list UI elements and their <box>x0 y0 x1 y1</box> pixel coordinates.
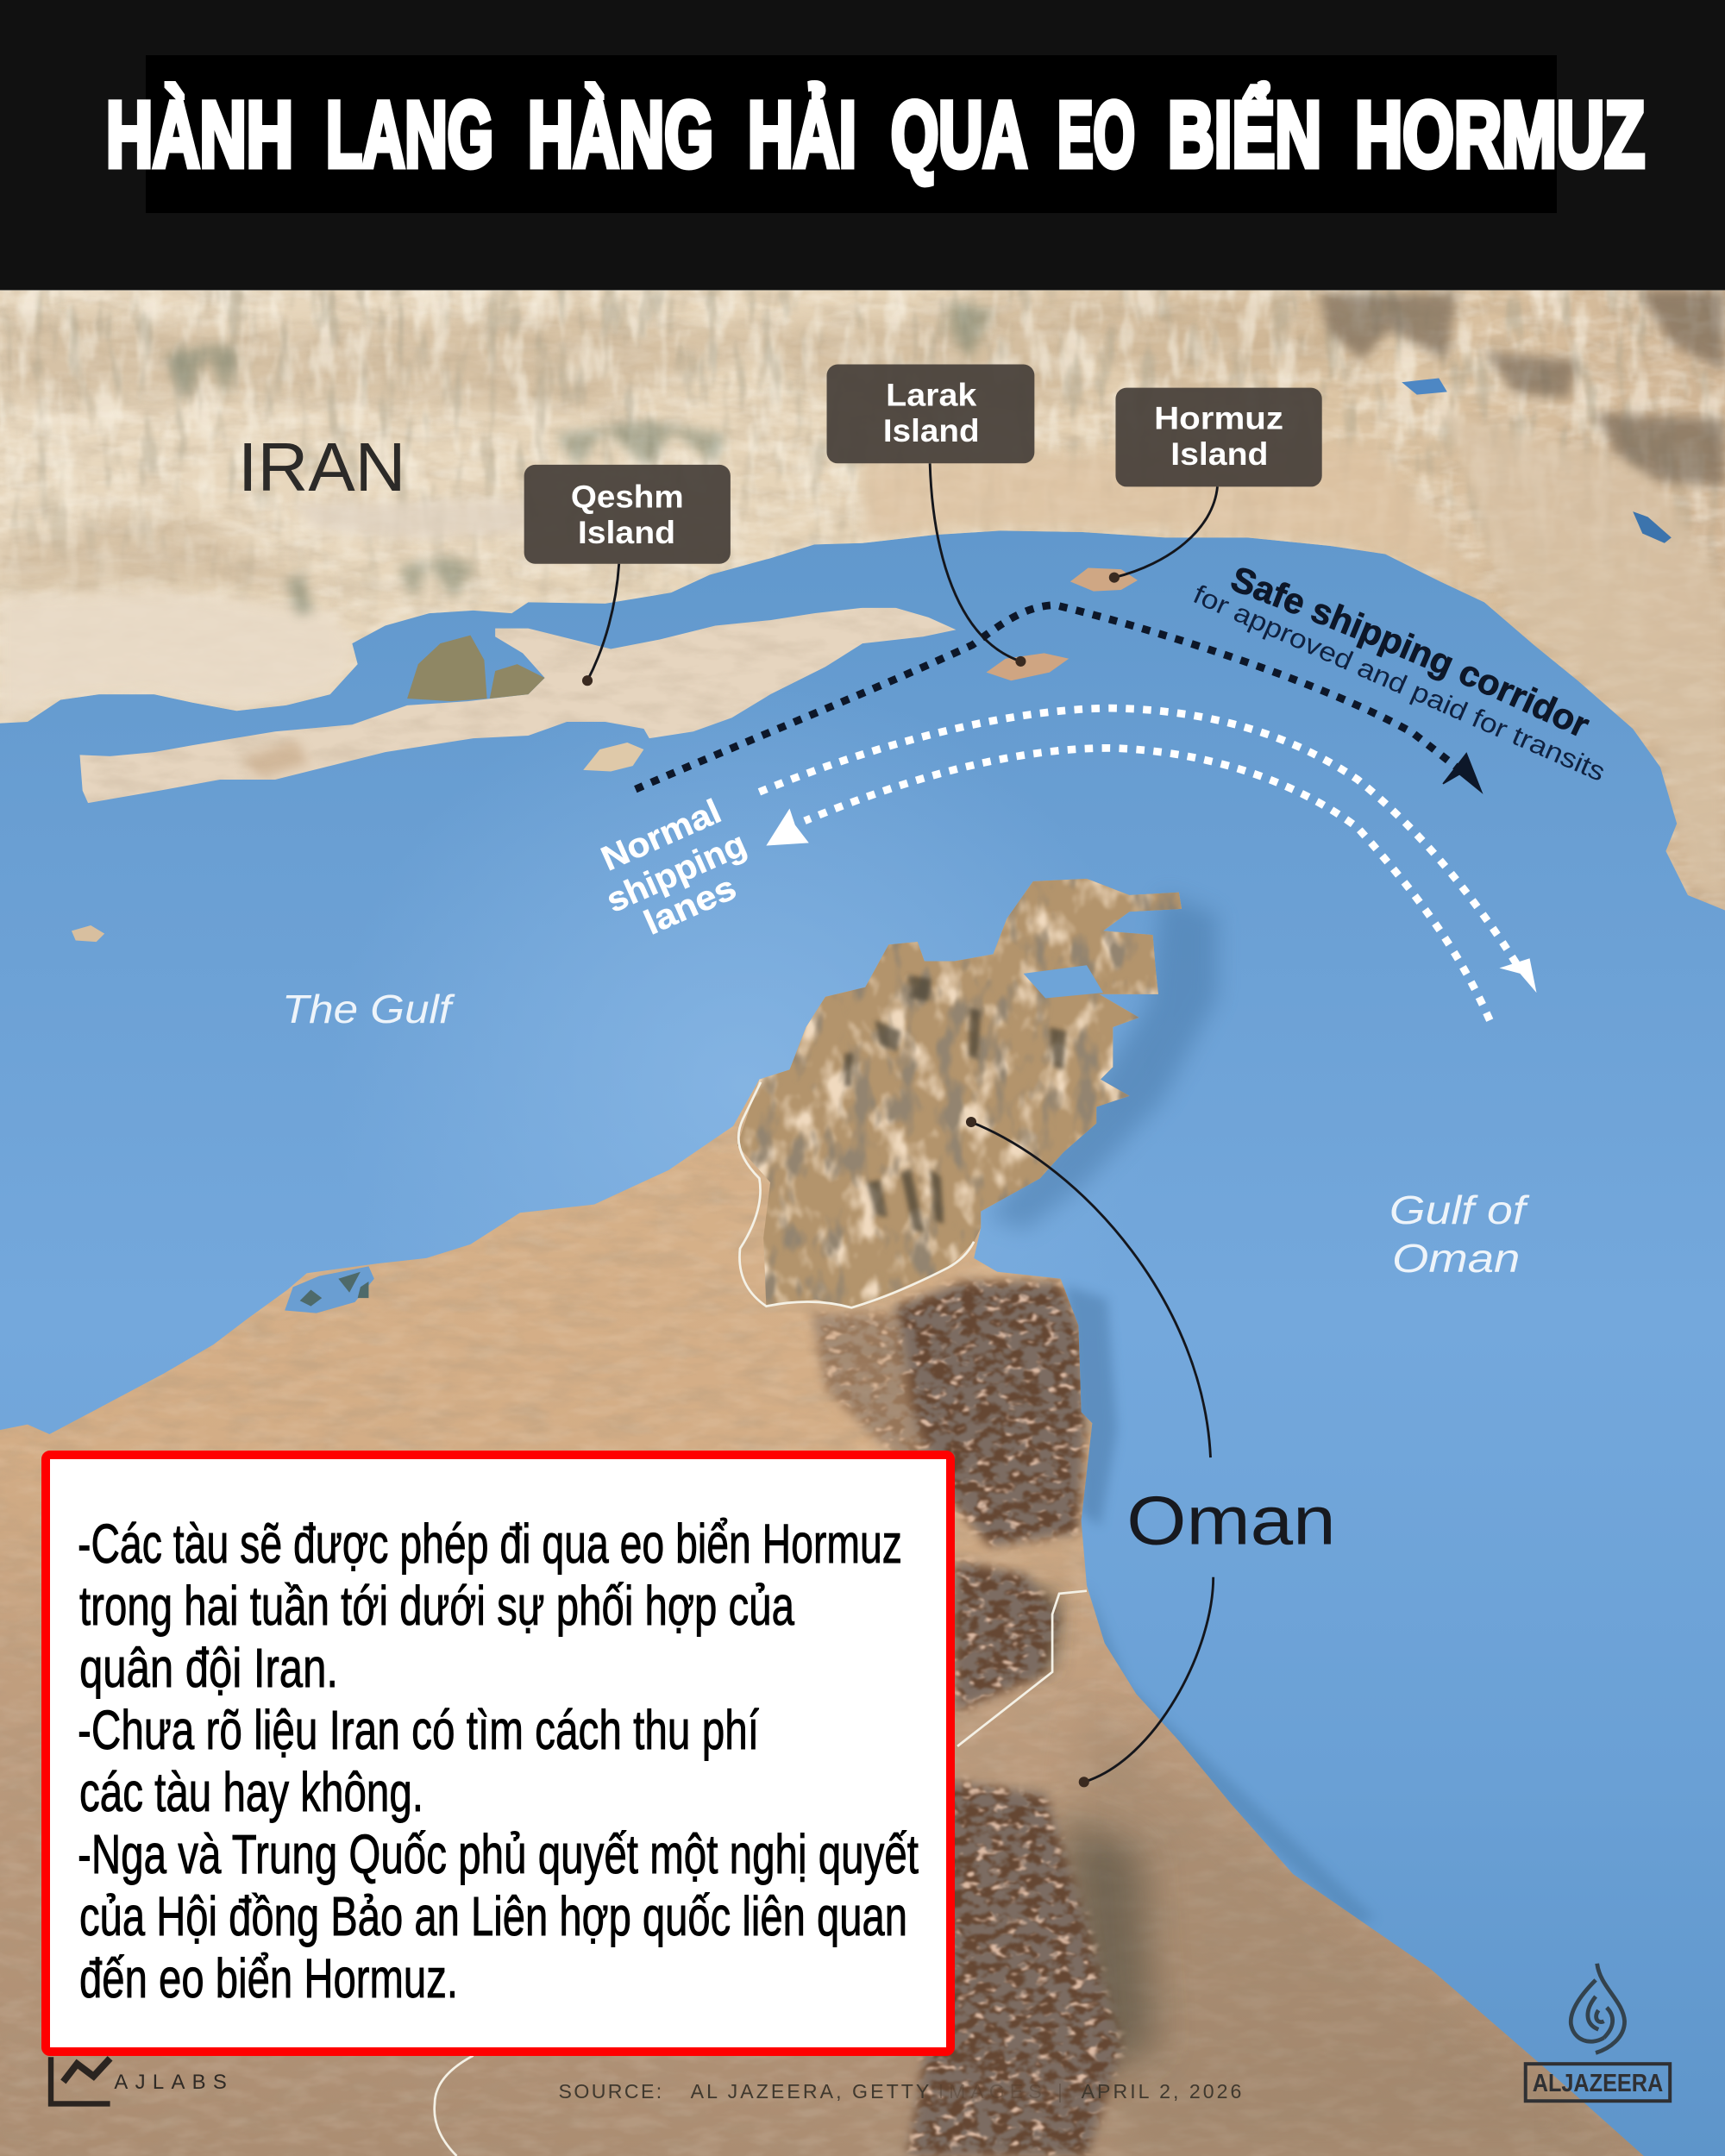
leader end dots <box>582 573 1120 1787</box>
label: normal shipping lanes: lanes <box>638 868 742 943</box>
Hormuz Island <box>1070 567 1138 592</box>
source line: APRIL 2, 2026 <box>1082 2080 1244 2103</box>
label: normal shipping lanes: shipping <box>601 825 752 920</box>
land: Iran mainland <box>0 290 1725 923</box>
source line: SOURCE: <box>559 2080 664 2103</box>
mangrove islets off Qeshm <box>407 636 545 701</box>
label: Gulf of Oman: Oman <box>1392 1236 1520 1281</box>
key points text: đến eo biển Hormuz. <box>79 1947 458 2009</box>
land: UAE and Oman coast <box>0 880 1725 2156</box>
key points text: -Các tàu sẽ được phép đi qua eo biển Hormuz <box>78 1513 902 1575</box>
Qeshm Island <box>79 607 956 803</box>
icon: Al Jazeera calligraphic logo <box>1571 1964 1625 2053</box>
label: Gulf of Oman: Gulf of <box>1389 1188 1530 1232</box>
label: safe shipping corridor: Safe shipping corridor <box>1232 567 1590 736</box>
source line: AL JAZEERA, GETTY <box>691 2080 932 2103</box>
AJLabs logo <box>51 2057 234 2103</box>
route: safe shipping corridor <box>636 605 1482 792</box>
title: BIỂN <box>1168 82 1321 186</box>
label: normal shipping lanes: Normal <box>596 793 727 879</box>
key points text <box>78 1513 919 2009</box>
label: Larak Island: Larak <box>886 377 977 412</box>
Al Jazeera wordmark <box>1526 2064 1670 2101</box>
title <box>106 82 1645 186</box>
key points text: các tàu hay không. <box>79 1761 423 1823</box>
label: normal shipping lanes <box>596 793 752 943</box>
title: HẢI <box>748 82 856 186</box>
key points text: -Nga và Trung Quốc phủ quyết một nghị quyết <box>78 1823 919 1885</box>
label: Larak Island <box>827 365 1034 463</box>
label: Qeshm Island: Island <box>578 515 675 550</box>
AJLabs logo: AJLABS <box>114 2071 234 2094</box>
panel: key points <box>46 1455 950 2052</box>
label: Hormuz Island <box>1115 388 1322 486</box>
Al Jazeera wordmark: ALJAZEERA <box>1533 2070 1663 2097</box>
label: Oman: Oman <box>1126 1482 1336 1558</box>
title: EO <box>1057 82 1135 186</box>
label: Larak Island: Island <box>883 413 980 448</box>
label: Qeshm Island: Qeshm <box>571 479 684 514</box>
label: Qeshm Island <box>524 465 731 564</box>
Musandam peninsula mountains <box>737 879 1182 1307</box>
international borders <box>435 1082 1087 2156</box>
key points text: -Chưa rõ liệu Iran có tìm cách thu phí <box>78 1699 759 1761</box>
small western islet <box>72 925 104 942</box>
Oman dark ridges <box>808 1274 1125 2156</box>
label: Gulf of Oman <box>1389 1188 1530 1281</box>
key points text: của Hội đồng Bảo an Liên hợp quốc liên quan <box>79 1885 907 1947</box>
small island south of Qeshm <box>583 743 643 771</box>
source line <box>559 2080 1244 2103</box>
label: Hormuz Island: Island <box>1170 436 1268 472</box>
route: normal shipping lanes <box>759 708 1536 1020</box>
label: Iran: IRAN <box>238 429 405 505</box>
title: LANG <box>326 82 493 186</box>
Larak Island <box>987 653 1069 680</box>
key points text: quân đội Iran. <box>79 1637 338 1699</box>
label: Hormuz Island: Hormuz <box>1154 400 1283 436</box>
title: HÀNG <box>528 82 713 186</box>
label: for approved and paid for transits: for approved and paid for transits <box>1194 585 1603 780</box>
source line: IMAGES | <box>938 2080 1064 2103</box>
leader lines <box>587 463 1217 1782</box>
title: QUA <box>891 82 1027 186</box>
header band <box>0 0 1725 289</box>
title: HÀNH <box>106 82 293 186</box>
key points text: trong hai tuần tới dưới sự phối hợp của <box>79 1575 794 1637</box>
label: The Gulf: The Gulf <box>282 987 455 1031</box>
